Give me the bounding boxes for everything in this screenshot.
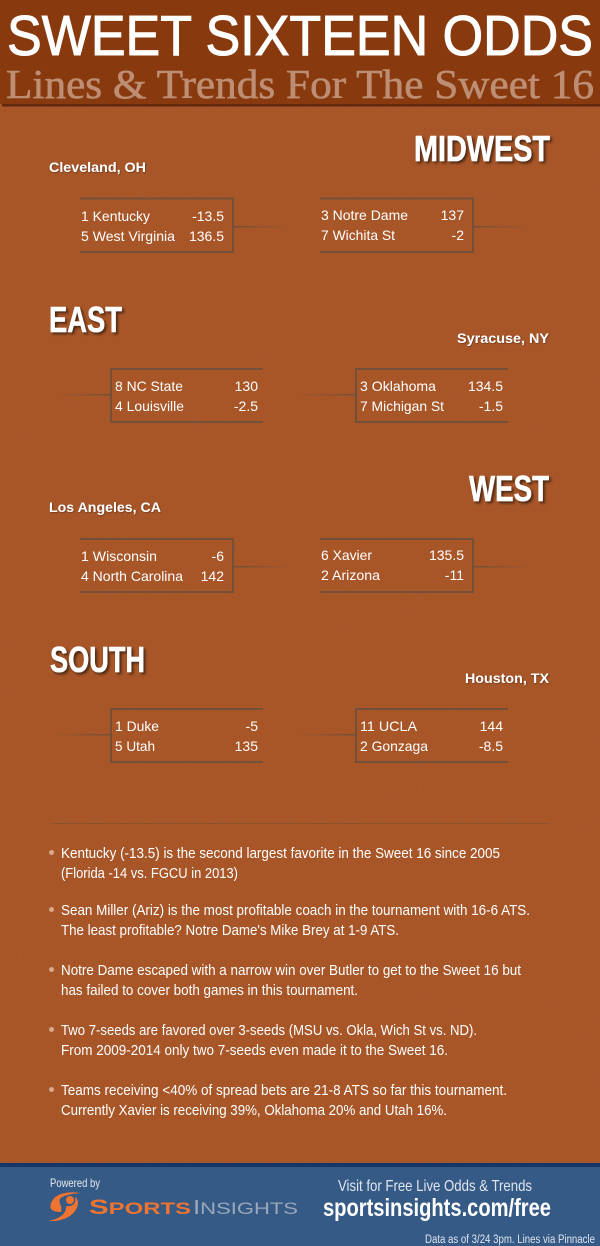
bracket: Kentucky vs West Virginia: -13.5 — [192, 208, 224, 224]
header band — [0, 0, 600, 106]
icon: Sports Insights logo mark — [48, 1192, 80, 1221]
subtitle: Lines & Trends For The Sweet 16 — [6, 61, 594, 107]
bracket: Xavier vs Arizona — [320, 539, 532, 592]
logo wordmark — [89, 1196, 298, 1219]
trends list — [49, 845, 530, 1119]
region: Midwest — [49, 128, 550, 252]
bracket: Kentucky vs West Virginia: 5 West Virginia — [81, 228, 175, 244]
url: sportsinsights.com/free — [323, 1194, 551, 1222]
region: West — [49, 468, 549, 592]
location: Los Angeles: Los Angeles, CA — [49, 499, 161, 515]
bracket: Xavier vs Arizona: 6 Xavier — [321, 547, 372, 563]
bracket: Notre Dame vs Wichita St: 7 Wichita St — [321, 227, 395, 243]
bracket: NC State vs Louisville — [52, 369, 263, 422]
bracket: Duke vs Utah: 5 Utah — [115, 738, 155, 754]
bracket: Notre Dame vs Wichita St: -2 — [452, 227, 464, 243]
bracket: Oklahoma vs Michigan St: 3 Oklahoma — [360, 378, 436, 394]
bullet: Notre Dame — [49, 962, 522, 999]
bullet: Sean Miller: The least profitable? Notre Dame's Mike Brey at 1-9 ATS. — [61, 922, 399, 939]
bracket: Duke vs Utah: 1 Duke — [115, 718, 159, 734]
region: East — [49, 299, 550, 422]
bracket: Notre Dame vs Wichita St — [320, 198, 532, 252]
region: South — [50, 639, 550, 762]
logo wordmark: S PORTS — [89, 1196, 191, 1219]
powered by label: Powered by — [50, 1176, 100, 1190]
bullet: Seven seeds: Two 7-seeds are favored over 3-seeds (MSU vs. Okla, Wich St vs. ND). — [61, 1022, 477, 1039]
bracket: UCLA vs Gonzaga — [297, 709, 508, 762]
heading: West: WEST — [469, 468, 549, 509]
bracket: UCLA vs Gonzaga: -8.5 — [479, 738, 503, 754]
bracket: UCLA vs Gonzaga: 11 UCLA — [360, 718, 418, 734]
bracket: NC State vs Louisville: 4 Louisville — [115, 398, 184, 414]
bullet: Sean Miller — [49, 902, 530, 939]
heading: East: EAST — [49, 299, 122, 340]
bullet: Kentucky favorite: Kentucky (-13.5) is the second largest favorite in the Sweet 16 since 2005 — [61, 845, 500, 862]
bracket: NC State vs Louisville: 130 — [235, 378, 258, 394]
bracket: Duke vs Utah: -5 — [246, 718, 258, 734]
bracket: Wisconsin vs North Carolina: -6 — [212, 548, 224, 564]
bracket: Oklahoma vs Michigan St: -1.5 — [479, 398, 503, 414]
heading: Midwest: MIDWEST — [414, 128, 550, 169]
bracket: Notre Dame vs Wichita St: 137 — [441, 207, 464, 223]
bracket: Xavier vs Arizona: 135.5 — [429, 547, 464, 563]
bullet: Kentucky favorite: (Florida -14 vs. FGCU in 2013) — [61, 865, 238, 882]
bullet: Notre Dame: has failed to cover both games in this tournament. — [61, 982, 358, 999]
bullet: Kentucky favorite — [49, 845, 500, 882]
bracket: Oklahoma vs Michigan St — [297, 369, 508, 422]
bracket: Wisconsin vs North Carolina: 1 Wisconsin — [81, 548, 157, 564]
bullet: Seven seeds: From 2009-2014 only two 7-seeds even made it to the Sweet 16. — [61, 1042, 448, 1059]
bullet: Seven seeds — [49, 1022, 477, 1059]
bracket: Kentucky vs West Virginia: 136.5 — [189, 228, 224, 244]
location: Syracuse: Syracuse, NY — [457, 330, 550, 346]
bullet: Sean Miller: Sean Miller (Ariz) is the most profitable coach in the tournament with 16-6 ATS. — [61, 902, 530, 919]
bracket: Duke vs Utah — [52, 709, 263, 762]
footer band — [0, 1163, 600, 1246]
bracket: UCLA vs Gonzaga: 144 — [480, 718, 503, 734]
bracket: Wisconsin vs North Carolina — [80, 539, 292, 592]
bullet: Spread bets — [49, 1082, 507, 1119]
bracket: Wisconsin vs North Carolina: 142 — [201, 568, 224, 584]
bracket: Xavier vs Arizona: 2 Arizona — [321, 567, 380, 583]
bracket: Oklahoma vs Michigan St: 7 Michigan St — [360, 398, 444, 414]
location: Houston: Houston, TX — [465, 670, 550, 686]
bracket: NC State vs Louisville: 8 NC State — [115, 378, 183, 394]
bracket: NC State vs Louisville: -2.5 — [234, 398, 258, 414]
bracket: Oklahoma vs Michigan St: 134.5 — [468, 378, 503, 394]
call to action: Visit for Free Live Odds & Trends — [338, 1178, 532, 1195]
heading: South: SOUTH — [50, 639, 145, 680]
bullet: Spread bets: Teams receiving <40% of spread bets are 21-8 ATS so far this tournament. — [61, 1082, 507, 1099]
bracket: Xavier vs Arizona: -11 — [445, 567, 464, 583]
location: Cleveland: Cleveland, OH — [49, 159, 146, 175]
bracket: Kentucky vs West Virginia — [80, 198, 292, 252]
bracket: UCLA vs Gonzaga: 2 Gonzaga — [360, 738, 428, 754]
bullet: Notre Dame: Notre Dame escaped with a narrow win over Butler to get to the Sweet 16 but — [61, 962, 522, 979]
bracket: Kentucky vs West Virginia: 1 Kentucky — [81, 208, 150, 224]
bracket: Notre Dame vs Wichita St: 3 Notre Dame — [321, 207, 408, 223]
logo wordmark: INSIGHTS — [193, 1197, 298, 1219]
bracket: Duke vs Utah: 135 — [235, 738, 258, 754]
bullet: Spread bets: Currently Xavier is receiving 39%, Oklahoma 20% and Utah 16%. — [61, 1102, 447, 1119]
bracket: Wisconsin vs North Carolina: 4 North Carolina — [81, 568, 183, 584]
